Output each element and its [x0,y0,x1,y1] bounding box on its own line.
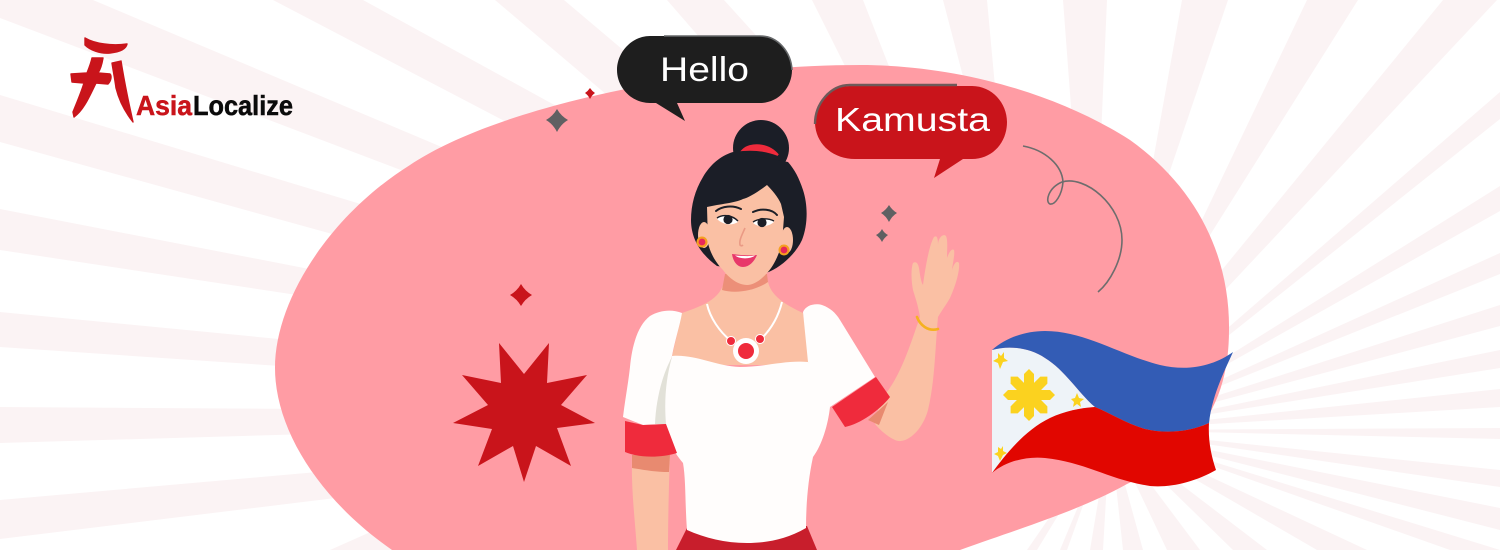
left cuff [625,421,677,457]
necklace [707,302,782,364]
flag red stripe [992,407,1216,486]
red nine-point star [453,343,595,482]
squiggle line [1023,146,1122,292]
speech bubble: Hello [617,36,792,121]
right eye [753,218,774,227]
right earring [778,244,790,256]
logo wordmark: Asia: Asia [136,90,192,121]
left ear [698,222,710,248]
skirt [676,526,817,550]
right ear [781,227,793,253]
left arm [632,455,670,550]
left eye [717,215,738,224]
face [707,185,784,285]
right cuff [832,377,890,427]
left arm shadow [632,455,670,472]
sparkle: gray upper right [881,205,897,222]
hair [691,152,807,273]
flag star right [1071,393,1084,407]
nose [740,228,745,246]
logo mark [71,38,133,122]
woman character [623,120,959,550]
right arm shadow [868,402,888,425]
hair tie [743,145,778,155]
hand [912,235,959,317]
flag white triangle [992,348,1095,473]
flag star bottom [994,446,1007,461]
sparkle: small red top [585,88,595,99]
neck and chest [670,275,810,365]
right eyebrow [753,210,777,215]
pink blob backdrop [275,65,1229,550]
flag sun [1003,369,1055,421]
speech bubble: Kamusta: Kamusta [835,101,991,138]
flag star top [993,352,1008,369]
speech bubble: Kamusta [815,85,1007,178]
hair bun [733,120,789,176]
logo wordmark: Localize: Localize [193,90,293,121]
logo: AsiaLocalize [71,38,293,122]
sparkle: gray near hello [546,109,568,132]
sparkle: gray lower right [876,229,888,242]
right sleeve [803,304,875,407]
left eyebrow [716,207,741,211]
left sleeve [623,311,682,425]
Philippine flag [992,331,1233,486]
speech bubble: Hello: Hello [660,51,749,89]
mouth [732,254,757,267]
blouse shadow [655,357,672,424]
right arm [875,317,938,441]
sparkle: red left [510,284,532,306]
blouse body [664,356,830,543]
neck shadow [722,274,768,292]
bracelet [917,317,938,330]
left earring [696,236,708,248]
flag blue stripe [992,331,1233,432]
